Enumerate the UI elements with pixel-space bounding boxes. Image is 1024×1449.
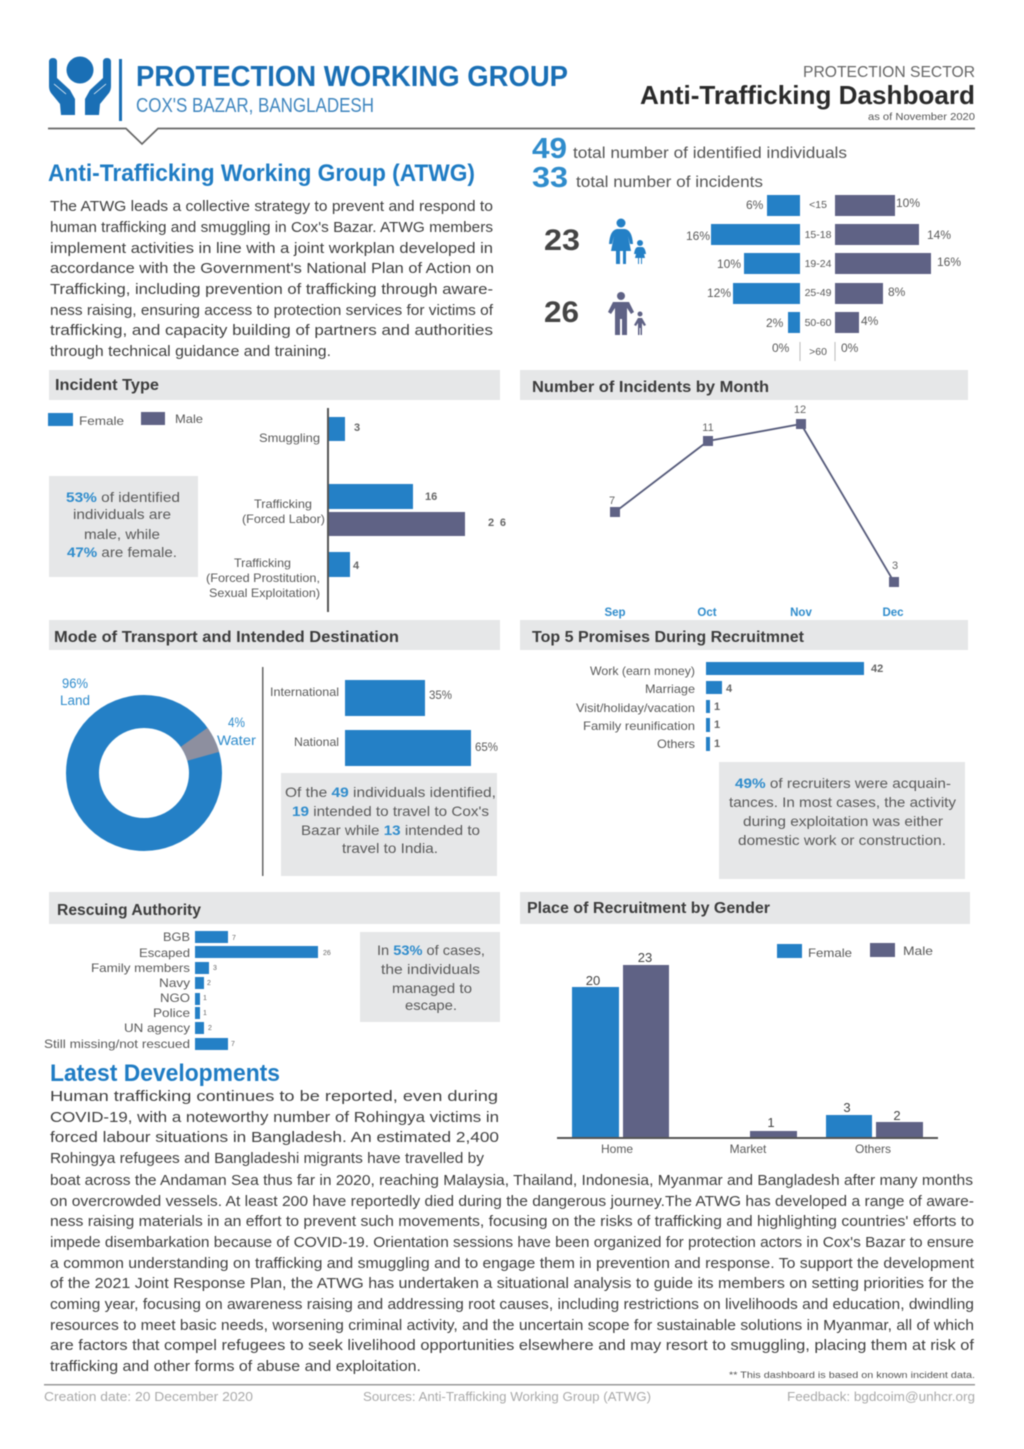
- bar chart: rescuing authority: 7: [232, 935, 236, 942]
- heading: place of recruitment: Place of Recruitment by Gender: [527, 900, 770, 917]
- bar chart: rescuing authority: Navy: [159, 976, 190, 990]
- chart: age pyramid: 16%: [937, 255, 961, 269]
- callout: recruiters: domestic work or construction.: [738, 832, 946, 848]
- text block: latest developments: COVID-19, with a noteworthy number of Rohingya victims in: [50, 1110, 499, 1126]
- text block: latest developments: ness raising materials in an effort to prevent such movements, focusing on the risks of trafficking and highlighting countries' efforts to: [50, 1214, 974, 1230]
- stat: totals: 33: [532, 162, 568, 194]
- line chart: 3: [892, 560, 898, 572]
- panel: incidents by month: [520, 370, 968, 619]
- heading: rescuing authority: [49, 892, 500, 924]
- bar chart: place by gender: [557, 950, 938, 1156]
- text block: latest developments: forced labour situations in Bangladesh. An estimated 2,400: [50, 1130, 499, 1146]
- bar chart: promises: Others: [657, 737, 695, 751]
- stat: totals: total number of identified individuals: [573, 145, 847, 162]
- line chart: Sep: [604, 607, 626, 619]
- title: protection working group: PROTECTION WORKING GROUP: [136, 61, 568, 93]
- bar chart: incident type: 26: [488, 517, 506, 529]
- chart: age pyramid: 15-18: [805, 229, 832, 241]
- bar chart: rescuing authority: 1: [203, 1010, 207, 1017]
- chart: age pyramid: 6%: [746, 198, 764, 212]
- chart: age pyramid: 0%: [772, 341, 790, 355]
- line chart: Dec: [882, 607, 904, 619]
- callout: destination: 19 intended to travel to Cox's: [292, 803, 489, 819]
- callout: escape: In 53% of cases,: [377, 942, 485, 958]
- bar chart: rescuing authority: Still missing/not rescued: [44, 1037, 190, 1051]
- bar chart: rescuing authority: 3: [213, 965, 217, 972]
- panel: place of recruitment: [520, 892, 970, 1156]
- callout: escape: [360, 932, 500, 1022]
- bar chart: promises: Work (earn money): [590, 664, 695, 678]
- bar chart: place by gender: Home: [601, 1142, 633, 1156]
- chart: age pyramid: 50-60: [805, 317, 832, 329]
- bar chart: promises: Marriage: [645, 682, 695, 696]
- footnote: ** This dashboard is based on known incident data.: [729, 1370, 975, 1380]
- stat: female count: 23: [544, 224, 580, 257]
- donut chart: mode of transport: [60, 676, 257, 834]
- bar chart: place by gender: Others: [855, 1142, 891, 1156]
- header rule with notch: [48, 128, 975, 144]
- bar chart: place by gender: 20: [586, 973, 600, 988]
- callout: gender share: 53% of identified: [66, 489, 180, 505]
- legend: Female: [808, 946, 852, 960]
- callout: escape: the individuals: [381, 961, 480, 977]
- text block: latest developments: are factors that compel refugees to seek livelihood opportunities elsewhere and may resort to smuggling, placing them at risk of: [50, 1338, 975, 1354]
- callout: escape: escape.: [405, 997, 457, 1013]
- heading: top 5 promises: [520, 620, 968, 650]
- callout: destination: [281, 773, 497, 876]
- heading: dashboard title: PROTECTION SECTOR: [803, 64, 975, 81]
- bar chart: incident type: 3: [354, 422, 360, 434]
- heading: dashboard title: [640, 64, 975, 123]
- text block: ATWG description: through technical guidance and training.: [50, 344, 331, 360]
- callout: destination: Of the 49 individuals identified,: [285, 784, 496, 800]
- callout: gender share: individuals are: [73, 506, 171, 522]
- callout: recruiters: tances. In most cases, the activity: [729, 794, 956, 810]
- bar chart: rescuing authority: BGB: [163, 930, 190, 944]
- stat: male count: 26: [544, 296, 579, 329]
- legend: [777, 943, 933, 960]
- bar chart: promises: Visit/holiday/vacation: [576, 701, 695, 715]
- text block: latest developments: Rohingya refugees and Bangladeshi migrants have travelled by: [50, 1151, 485, 1167]
- panel: transport and destination: [49, 620, 500, 876]
- text block: latest developments: a common understanding on trafficking and smuggling and to engage them in prevention and response. To support the development: [50, 1256, 974, 1272]
- legend: Male: [903, 944, 933, 958]
- line chart: 7: [609, 495, 615, 507]
- heading: latest developments: Latest Developments: [50, 1060, 280, 1087]
- bar chart: intended destination: 65%: [475, 740, 498, 754]
- text block: ATWG description: trafficking, and capacity building of partners and authorities: [50, 323, 493, 339]
- text block: latest developments: impede disembarkation because of COVID-19. Orientation sessions have been organized for protection actors in Cox's Bazar to ensure: [50, 1235, 974, 1251]
- legend: Female: [79, 414, 124, 428]
- bar chart: incident type: Trafficking: [234, 556, 291, 570]
- panel: incident type: [48, 370, 506, 612]
- bar chart: rescuing authority: 2: [207, 980, 211, 987]
- bar chart: place by gender: Market: [730, 1142, 767, 1156]
- callout: recruiters: during exploitation was either: [743, 813, 943, 829]
- bar chart: incident type: (Forced Labor): [242, 512, 325, 526]
- chart: age pyramid: 8%: [888, 285, 906, 299]
- line chart: Oct: [697, 607, 717, 619]
- bar chart: place by gender: 23: [638, 950, 652, 965]
- chart: age pyramid: 16%: [686, 229, 710, 243]
- bar chart: incident type: (Forced Prostitution,: [206, 571, 320, 585]
- bar chart: rescuing authority: Escaped: [139, 946, 190, 960]
- bar chart: place by gender: 3: [843, 1100, 851, 1115]
- heading: incidents by month: [520, 370, 968, 400]
- heading: transport and destination: [49, 620, 500, 650]
- line chart: [604, 404, 904, 619]
- heading: dashboard title: as of November 2020: [868, 111, 975, 123]
- callout: destination: travel to India.: [342, 840, 438, 856]
- text block: latest developments: Human trafficking continues to be reported, even during: [50, 1089, 498, 1105]
- bar chart: rescuing authority: 7: [231, 1041, 235, 1048]
- bar chart: promises: 1: [714, 701, 720, 713]
- callout: gender share: [49, 476, 198, 577]
- chart: age pyramid: 12%: [707, 286, 731, 300]
- heading: top 5 promises: Top 5 Promises During Recruitmnet: [532, 629, 805, 646]
- text block: ATWG description: accordance with the Government's National Plan of Action on: [50, 261, 494, 277]
- heading: incident type: Incident Type: [55, 377, 159, 394]
- line chart: 12: [794, 404, 806, 416]
- chart: age pyramid: <15: [809, 199, 827, 211]
- heading: transport and destination: Mode of Transport and Intended Destination: [54, 629, 399, 646]
- stat: male count: [544, 292, 646, 335]
- line chart: Nov: [790, 607, 812, 619]
- chart: age pyramid: 19-24: [805, 258, 832, 270]
- donut chart: mode of transport: 96%: [62, 676, 88, 691]
- chart: age pyramid: 0%: [841, 341, 859, 355]
- heading: place of recruitment: [520, 892, 970, 924]
- bar chart: rescuing authority: NGO: [160, 991, 190, 1005]
- text block: ATWG description: ness raising, ensuring access to protection services for victims of: [50, 303, 494, 319]
- callout: recruiters: 49% of recruiters were acquain-: [735, 775, 951, 791]
- stat: female count: [544, 218, 646, 264]
- bar chart: intended destination: National: [294, 735, 339, 749]
- bar chart: rescuing authority: 2: [208, 1025, 212, 1032]
- bar chart: rescuing authority: [44, 930, 331, 1051]
- text block: latest developments: trafficking and other forms of abuse and exploitation.: [50, 1359, 421, 1375]
- donut chart: mode of transport: Land: [60, 693, 90, 708]
- stat: totals: 49: [532, 133, 567, 165]
- bar chart: incident type: Trafficking: [254, 497, 312, 511]
- title: protection working group: COX'S BAZAR, BANGLADESH: [136, 95, 374, 117]
- panel: rescuing authority: [44, 892, 500, 1051]
- callout: gender share: 47% are female.: [67, 544, 177, 560]
- stat: totals: total number of incidents: [576, 174, 763, 191]
- heading: ATWG: Anti-Trafficking Working Group (ATWG): [48, 160, 475, 187]
- bar chart: promises: 1: [714, 738, 720, 750]
- bar chart: incident type: Smuggling: [259, 431, 320, 445]
- chart: age pyramid: 14%: [927, 228, 951, 242]
- bar chart: intended destination: International: [270, 685, 339, 699]
- heading: rescuing authority: Rescuing Authority: [57, 902, 201, 919]
- icon: woman and child: [609, 218, 646, 264]
- text block: ATWG description: The ATWG leads a collective strategy to prevent and respond to: [50, 199, 493, 215]
- icon: man and child: [608, 292, 646, 335]
- bar chart: promises: 42: [871, 663, 883, 675]
- line chart: 11: [702, 422, 714, 434]
- bar chart: promises: 1: [714, 719, 720, 731]
- chart: age pyramid: >60: [809, 346, 827, 358]
- stat: totals: [532, 133, 847, 194]
- text block: latest developments: resources to meet basic needs, worsening criminal activity, and the uncertain scope for sustainable solutions in Myanmar, all of which: [50, 1318, 974, 1334]
- callout: destination: Bazar while 13 intended to: [301, 822, 480, 838]
- bar chart: rescuing authority: Police: [153, 1006, 190, 1020]
- bar chart: incident type: Sexual Exploitation): [209, 586, 320, 600]
- bar chart: promises: 4: [726, 683, 733, 695]
- legend: [48, 412, 203, 428]
- chart: age pyramid: 25-49: [805, 287, 832, 299]
- callout: escape: managed to: [392, 980, 472, 996]
- text block: ATWG description: human trafficking and smuggling in Cox's Bazar. ATWG members: [50, 220, 493, 236]
- heading: incident type: [49, 370, 500, 400]
- footer: Feedback: bgdcoim@unhcr.org: [787, 1389, 975, 1404]
- heading: incidents by month: Number of Incidents by Month: [532, 379, 769, 396]
- legend: Male: [175, 412, 203, 426]
- title: protection working group: [136, 61, 568, 117]
- chart: age pyramid: 2%: [766, 316, 784, 330]
- bar chart: incident type: 4: [353, 560, 360, 572]
- bar chart: intended destination: [270, 680, 498, 766]
- text block: latest developments: boat across the Andaman Sea thus far in 2020, reaching Malaysia, Thailand, Indonesia, Myanmar and Bangladesh after many months: [50, 1173, 973, 1189]
- footer: Creation date: 20 December 2020: [44, 1389, 253, 1404]
- donut chart: mode of transport: 4%: [228, 715, 245, 730]
- bar chart: rescuing authority: Family members: [91, 961, 190, 975]
- callout: recruiters: [719, 762, 965, 879]
- bar chart: rescuing authority: 1: [203, 995, 207, 1002]
- text block: latest developments: of the 2021 Joint Response Plan, the ATWG has undertaken a situational analysis to guide its members on setting priorities for the: [50, 1276, 974, 1292]
- icon: protection logo: [49, 56, 122, 121]
- bar chart: rescuing authority: 26: [323, 950, 331, 957]
- bar chart: intended destination: 35%: [429, 688, 452, 702]
- text block: ATWG description: [50, 199, 494, 360]
- text block: ATWG description: Trafficking, including prevention of trafficking through aware-: [50, 282, 493, 298]
- text block: ATWG description: implement activities in line with a joint workplan developed in: [50, 241, 493, 257]
- text block: latest developments: coming year, focusing on awareness raising and addressing root causes, including restrictions on livelihoods and education, dwindling: [50, 1297, 974, 1313]
- footer: [44, 1389, 975, 1404]
- bar chart: promises: Family reunification: [583, 719, 695, 733]
- bar chart: incident type: 16: [425, 491, 437, 503]
- donut chart: mode of transport: Water: [217, 733, 257, 748]
- chart: age pyramid: 4%: [861, 314, 879, 328]
- chart: age pyramid: [686, 195, 961, 361]
- bar chart: place by gender: 2: [893, 1108, 901, 1123]
- panel: top 5 promises: [520, 620, 968, 879]
- heading: dashboard title: Anti-Trafficking Dashboard: [640, 80, 975, 110]
- text block: latest developments: [50, 1089, 975, 1375]
- chart: age pyramid: 10%: [717, 257, 741, 271]
- bar chart: rescuing authority: UN agency: [124, 1021, 190, 1035]
- bar chart: place by gender: 1: [767, 1115, 775, 1130]
- bar chart: incident type: [206, 408, 506, 612]
- bar chart: promises: [576, 662, 883, 751]
- chart: age pyramid: 10%: [896, 196, 920, 210]
- text block: latest developments: on overcrowded vessels. At least 200 have reportedly died during the dangerous journey.The ATWG has developed a range of aware-: [50, 1194, 974, 1210]
- footer: Sources: Anti-Trafficking Working Group (ATWG): [363, 1389, 651, 1404]
- callout: gender share: male, while: [84, 526, 160, 542]
